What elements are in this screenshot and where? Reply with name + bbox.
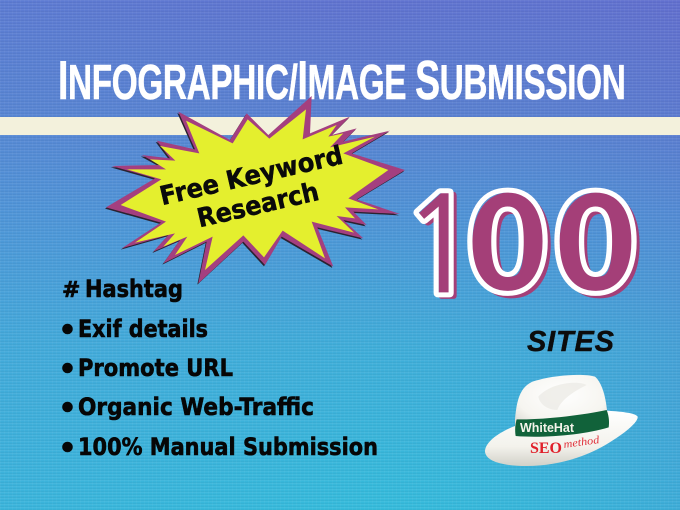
starburst yellow fill [121,109,388,270]
number white outline: 1 [398,180,483,316]
number white outline: 0 [464,134,551,332]
cream horizontal band [0,117,680,135]
number white outline [398,134,640,332]
starburst purple outline [106,96,405,283]
item: hashtag: # [62,278,80,303]
item: exif details: Exif details [78,315,208,343]
starburst text [157,141,353,241]
item: manual submission: 100% Manual Submission [78,433,378,461]
title: INFOGRAPHIC/IMAGE SUBMISSION [58,49,626,111]
hat method text: method [563,434,601,451]
number fill: 0 [555,137,644,335]
starburst text: Research [194,177,322,234]
sites label: SITES [527,326,615,358]
number white outline: 0 [551,134,640,332]
starburst badge [105,96,405,285]
item: organic web-traffic: Organic Web-Traffic [78,393,314,421]
icon: white hat [485,375,638,466]
item: hashtag: Hashtag [85,275,183,303]
number fill: 0 [468,137,555,335]
hat brim [485,411,638,466]
starburst text: Free Keyword [157,141,346,212]
number fill: 1 [402,183,487,318]
number fill [402,137,644,335]
hat band text: WhiteHat [520,421,575,435]
feature list [62,275,378,461]
hat seo text: SEO [530,440,562,457]
hat crown [515,375,607,430]
item: promote url: Promote URL [78,354,233,382]
starburst dark shadow [105,97,404,285]
hat crown dent [538,383,587,410]
hat green band [515,410,609,437]
big number 100 [398,134,644,335]
